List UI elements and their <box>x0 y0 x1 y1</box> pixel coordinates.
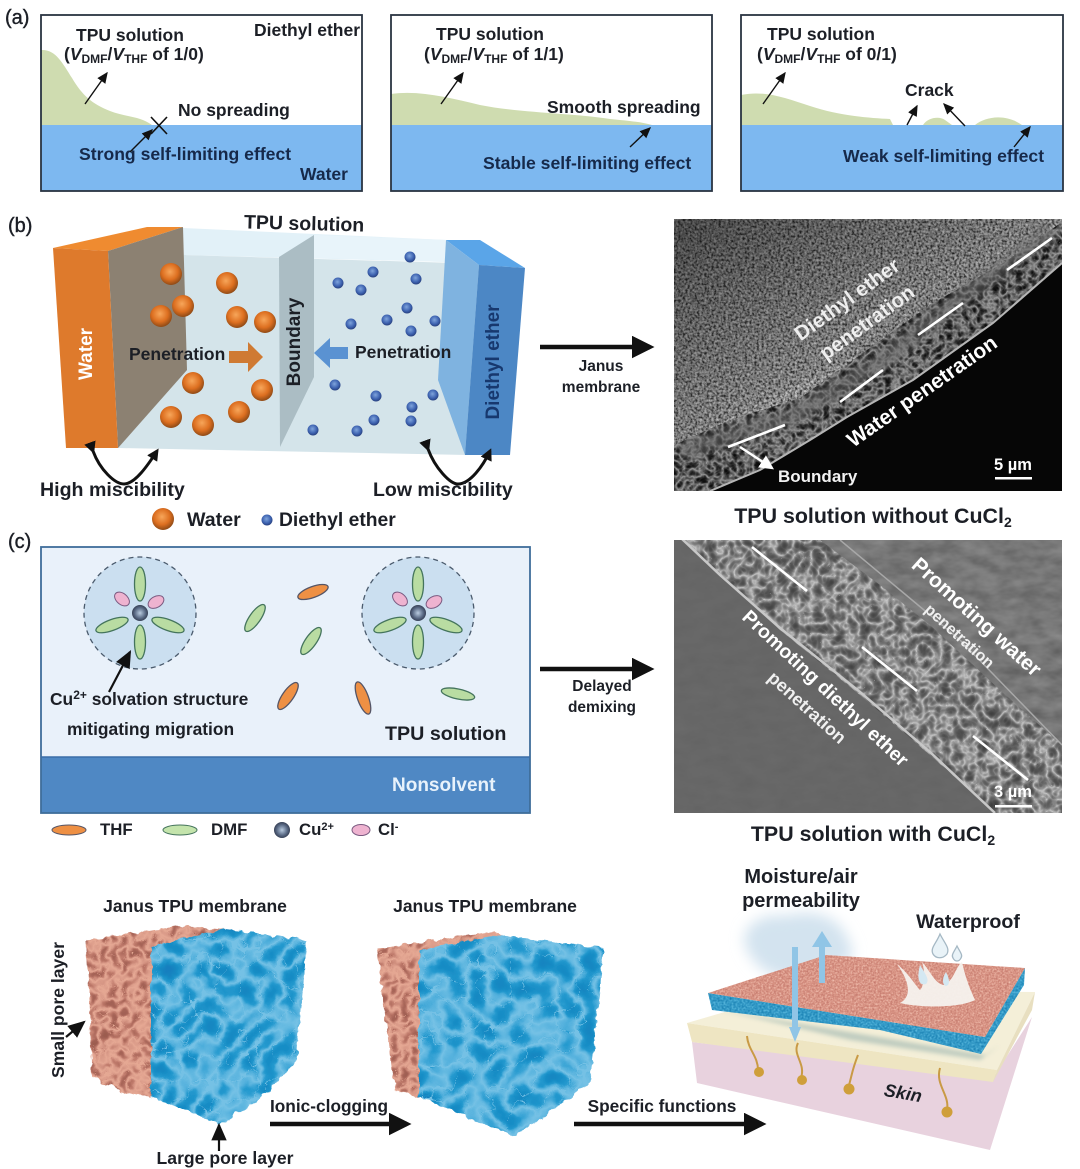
arrow: Specific functions: Specific functions <box>588 1096 736 1116</box>
caption: with CuCl2: 2 <box>987 832 995 848</box>
arrow: Janus membrane <box>540 347 650 396</box>
Waterproof label: Waterproof <box>916 911 1020 933</box>
skin block <box>692 1017 1032 1150</box>
Crack label: Crack <box>905 80 954 100</box>
Moisture label <box>742 866 861 912</box>
free molecules <box>241 581 476 716</box>
TPU solution label: of 0/1) <box>840 44 897 64</box>
boundary marks <box>728 238 1052 447</box>
arrow: Ionic-clogging: Ionic-clogging <box>270 1096 388 1116</box>
boundary plane: Boundary <box>284 297 305 386</box>
vapour cloud <box>744 913 852 978</box>
legend: molecules: Cl <box>378 820 395 839</box>
up arrow <box>812 931 832 983</box>
SEM image: with CuCl2 <box>674 538 1062 813</box>
small pore arrow <box>66 1022 84 1037</box>
solution droplet <box>41 50 152 125</box>
pore band <box>674 200 1062 491</box>
Diethyl ether label: Diethyl ether <box>254 20 360 40</box>
legend: molecules: 2+ <box>321 821 334 833</box>
label: (c): (c) <box>8 531 31 553</box>
penetration label: penetration <box>921 601 997 672</box>
TPU solution label: TPU solution <box>436 24 544 44</box>
water slab: Water <box>76 327 97 380</box>
TPU solution label: / <box>801 44 806 64</box>
cross mark <box>151 117 167 134</box>
boundary arrow <box>740 447 772 468</box>
Stable self-limiting label: Stable self-limiting effect <box>483 153 691 173</box>
Moisture label: Moisture/air <box>744 866 858 888</box>
legend: molecules: DMF <box>211 820 247 839</box>
SEM image: without CuCl2 <box>674 200 1062 491</box>
TPU solution label: TPU solution <box>385 723 506 745</box>
solvation cluster left <box>84 557 196 669</box>
arrow: delayed demixing <box>540 669 650 716</box>
scale bar 5 um: 5 µm <box>994 456 1032 474</box>
legend: molecules: THF <box>100 820 133 839</box>
TPU solution label: / <box>108 44 113 64</box>
penetration right <box>314 338 451 368</box>
solution film <box>391 93 652 125</box>
panel: a3 crack <box>741 15 1063 191</box>
arrow to edge <box>630 128 650 147</box>
TPU solution label: TPU solution <box>76 25 184 45</box>
skin model <box>687 866 1035 1150</box>
arrow: delayed demixing: Delayed <box>572 678 632 695</box>
membrane blue side <box>708 968 1025 1054</box>
solvation cluster right <box>362 557 474 669</box>
arrow to contact point <box>130 130 152 152</box>
low miscibility curved arrow <box>428 449 490 484</box>
arrow to droplet <box>85 73 107 104</box>
legend: molecules: Cu <box>299 820 321 839</box>
scale bar 3 um: 3 µm <box>994 783 1032 801</box>
panel: a2 smooth spreading <box>391 15 712 191</box>
boundary label: Boundary <box>778 467 858 486</box>
TPU solution label: TPU solution <box>767 24 875 44</box>
water drops <box>932 934 962 961</box>
Janus label 2: Janus TPU membrane <box>393 896 577 916</box>
down arrow <box>789 947 801 1042</box>
dense top layer <box>674 219 1062 449</box>
sweat glands <box>754 1067 952 1118</box>
TPU solution label: V <box>805 44 818 64</box>
water splash <box>897 962 975 1006</box>
promoting diethyl label: Promoting diethyl ether <box>738 606 913 772</box>
TPU solution label: THF <box>124 52 147 66</box>
diethyl ether slab <box>438 240 525 455</box>
boundary shading <box>680 230 1052 452</box>
diethyl ether slab: Diethyl ether <box>483 304 504 420</box>
arrow: Janus membrane: membrane <box>562 379 641 396</box>
penetration label: penetration <box>764 667 850 748</box>
TPU solution label: V <box>112 44 125 64</box>
solvation label: mitigating migration <box>67 719 234 739</box>
penetration label: penetration <box>815 281 919 365</box>
arrow: Janus membrane: Janus <box>579 358 623 375</box>
High miscibility label: High miscibility <box>40 479 185 501</box>
TPU solution label: DMF <box>82 52 108 66</box>
arrow: delayed demixing: demixing <box>568 699 636 716</box>
Moisture label: permeability <box>742 890 861 912</box>
TPU solution label: DMF <box>775 52 801 66</box>
foam cube 2 <box>372 925 608 1140</box>
Large pore layer label: Large pore layer <box>157 1148 294 1168</box>
Nonsolvent label: Nonsolvent <box>392 775 496 796</box>
large pore arrow <box>218 1125 220 1151</box>
solvation label <box>50 688 249 739</box>
panel: c solvation <box>41 547 530 813</box>
boundary marks <box>752 547 1028 780</box>
TPU solution label: (V <box>757 44 775 64</box>
Weak self-limiting label: Weak self-limiting effect <box>843 146 1044 166</box>
label: (b): (b) <box>8 215 32 237</box>
TPU solution label: (V <box>424 44 442 64</box>
penetration left <box>129 342 263 372</box>
panel: a1 no spreading <box>41 15 362 191</box>
water penetration label: Water penetration <box>843 331 1002 452</box>
solvation label: Cu <box>50 689 73 709</box>
epidermis layer <box>687 990 1035 1070</box>
Water label: Water <box>300 164 348 184</box>
membrane pink top <box>708 955 1025 1037</box>
solvation label: solvation structure <box>87 689 249 709</box>
Small pore layer label: Small pore layer <box>48 942 68 1078</box>
diagram: phase box <box>53 227 525 455</box>
TPU solution label <box>424 24 564 66</box>
TPU solution label: THF <box>817 52 840 66</box>
TPU solution label: of 1/1) <box>507 44 564 64</box>
pore band <box>674 540 1062 813</box>
caption: with CuCl2: TPU solution with CuCl <box>751 822 987 846</box>
TPU solution title: TPU solution <box>244 211 365 237</box>
arrow: Ionic-clogging <box>270 1096 407 1124</box>
membrane edge <box>710 263 1062 491</box>
boundary plane <box>279 235 447 447</box>
water droplets <box>150 263 276 436</box>
promoting water label: Promoting water <box>907 553 1046 681</box>
TPU solution label: DMF <box>442 52 468 66</box>
TPU solution label <box>64 25 204 66</box>
TPU solution box <box>183 228 447 262</box>
Skin label: Skin <box>883 1080 923 1106</box>
sweat ducts <box>747 1036 947 1110</box>
scale bar 5 um <box>994 458 1032 480</box>
membrane bright edge <box>681 538 995 813</box>
TPU solution label <box>757 24 897 66</box>
caption: without CuCl2: 2 <box>1004 514 1012 530</box>
high miscibility curved arrow <box>93 451 157 484</box>
cracked film <box>741 93 1022 125</box>
epidermis shadow <box>720 1010 1000 1060</box>
crack arrows <box>907 104 1030 147</box>
label: (a): (a) <box>5 7 29 29</box>
TPU solution label: THF <box>484 52 507 66</box>
legend: water / diethyl ether: Water <box>187 509 241 531</box>
diethyl ether droplets <box>308 252 440 436</box>
water slab <box>53 227 187 448</box>
diethyl ether penetration label: Diethyl ether <box>790 254 904 346</box>
Smooth spreading label: Smooth spreading <box>547 97 701 117</box>
Janus label 1: Janus TPU membrane <box>103 896 287 916</box>
TPU solution label: / <box>468 44 473 64</box>
TPU solution label: V <box>472 44 485 64</box>
caption: without CuCl2: TPU solution without CuCl <box>734 504 1004 528</box>
Strong self-limiting label: Strong self-limiting effect <box>79 144 291 164</box>
scale bar 3 um <box>994 786 1032 808</box>
arrow to film <box>441 73 463 104</box>
TPU solution label: (V <box>64 44 82 64</box>
No spreading label: No spreading <box>178 100 290 120</box>
solvation label: 2+ <box>73 688 87 702</box>
Low miscibility label: Low miscibility <box>373 479 513 501</box>
legend: water / diethyl ether: Diethyl ether <box>279 510 396 531</box>
penetration right: Penetration <box>355 342 451 362</box>
penetration left: Penetration <box>129 344 225 364</box>
legend: molecules <box>52 820 399 839</box>
legend: molecules: - <box>395 821 399 833</box>
solvation arrow <box>109 652 130 692</box>
TPU solution label: of 1/0) <box>147 44 204 64</box>
legend: water / diethyl ether <box>152 508 396 531</box>
foam cube 1 <box>80 920 310 1130</box>
arrow to film <box>763 73 785 104</box>
